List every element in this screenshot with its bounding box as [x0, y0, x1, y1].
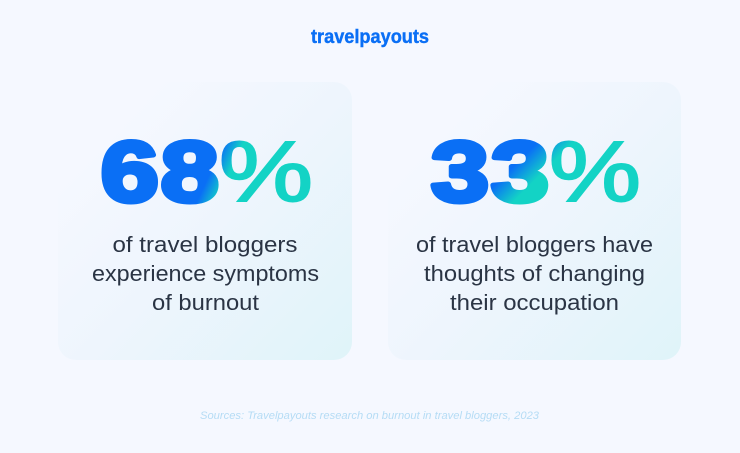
panel background: right card: [388, 82, 681, 360]
big number: 68%: 8: [161, 125, 219, 220]
panel: 68% statistic: [58, 82, 352, 360]
big number: 33%: [431, 125, 641, 220]
description: 68%: [92, 232, 319, 315]
panel: 33% statistic: [388, 82, 681, 360]
logo: travelpayouts: travelpayouts: [311, 27, 429, 48]
source note: Sources: Travelpayouts research on burnout in travel bloggers, 2023: [200, 410, 540, 422]
panel background: left card: [58, 82, 352, 360]
big number: 33%: 3: [491, 125, 549, 220]
description: 33%: of travel bloggers have: [416, 232, 653, 257]
description: 33%: their occupation: [450, 290, 619, 315]
big number: 33%: %: [549, 125, 641, 220]
big number: 68%: [101, 125, 313, 220]
big number: 68%: %: [219, 125, 313, 220]
big number: 33%: 3: [431, 125, 489, 220]
description: 33%: [416, 232, 653, 315]
description: 68%: of travel bloggers: [112, 232, 298, 257]
description: 68%: experience symptoms: [92, 261, 319, 286]
big number: 68%: 6: [101, 125, 159, 220]
description: 68%: of burnout: [152, 290, 260, 315]
description: 33%: thoughts of changing: [424, 261, 645, 286]
